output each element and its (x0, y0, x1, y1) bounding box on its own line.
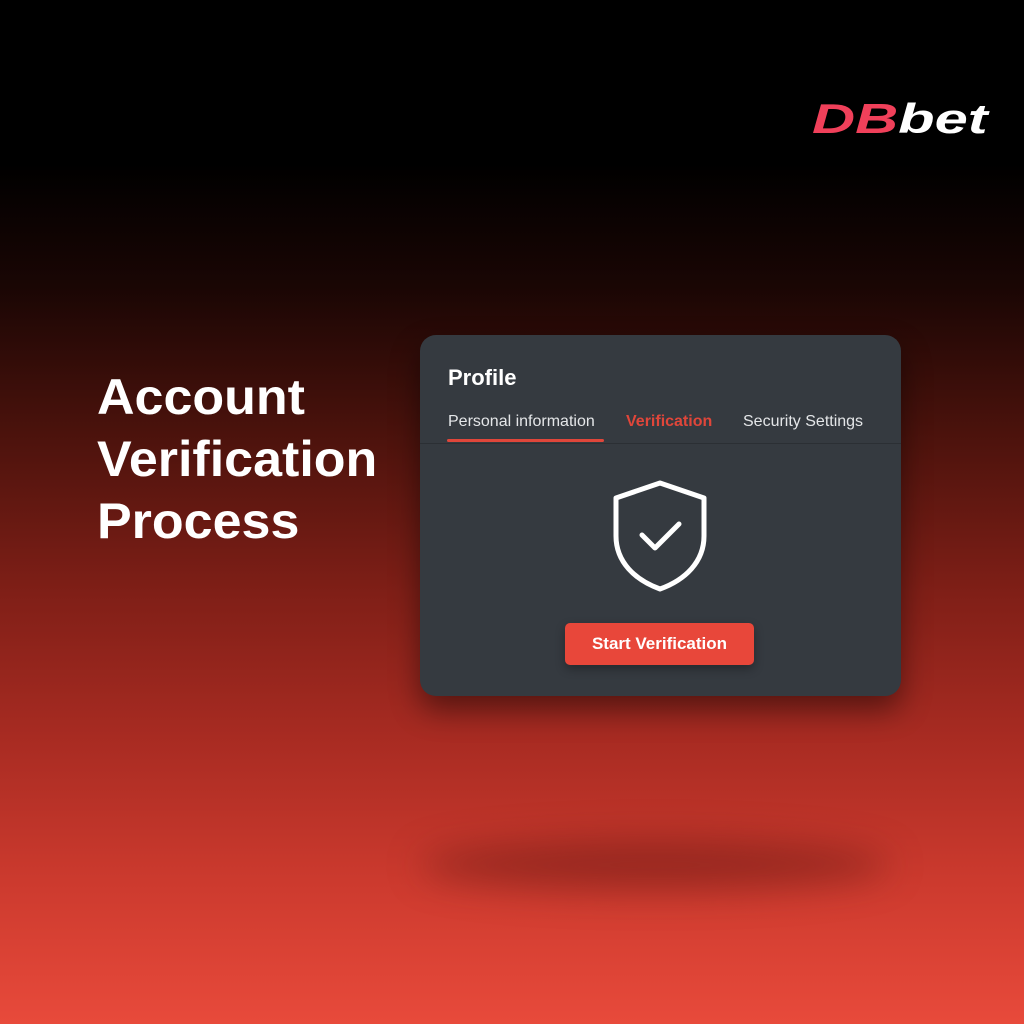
panel: profile card (420, 335, 901, 696)
heading: Profile: Profile (448, 365, 516, 390)
title: Account (97, 369, 305, 425)
title: Verification (97, 431, 377, 487)
tab: personal information: Personal information (448, 413, 595, 430)
floor shadow (420, 840, 890, 890)
title: Process (97, 493, 299, 549)
tab: verification: Verification (626, 413, 712, 430)
icon: shield check (614, 480, 706, 592)
tabs (420, 411, 901, 444)
button: start verification (565, 623, 754, 665)
button: start verification: Start Verification (592, 634, 727, 653)
tab underline (447, 439, 604, 442)
tab: security settings: Security Settings (743, 413, 863, 430)
title (97, 369, 377, 549)
logo: DBbet (812, 95, 988, 142)
